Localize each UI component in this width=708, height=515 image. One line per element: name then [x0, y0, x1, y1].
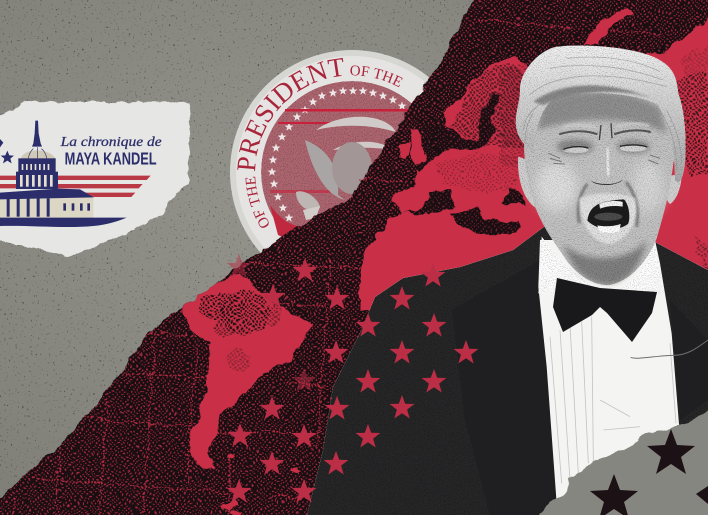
seal eagle and rays	[270, 109, 410, 245]
mouth interior	[587, 199, 629, 229]
Europe detail	[400, 57, 525, 234]
South America	[182, 273, 313, 470]
eyes	[563, 145, 647, 153]
red stars field	[227, 254, 478, 502]
Great Britain	[410, 130, 425, 165]
torn paper card	[0, 102, 190, 257]
background speckles	[0, 0, 480, 515]
tongue	[594, 213, 622, 221]
hair	[516, 45, 686, 182]
eye sockets shade	[557, 139, 593, 154]
cheeks	[536, 163, 577, 211]
Africa and Asia landmass	[360, 8, 708, 310]
forehead shadow	[537, 92, 667, 133]
shirt pleats	[550, 317, 676, 483]
flag stripes	[0, 176, 151, 197]
Capitol building	[0, 121, 94, 218]
Scandinavia and Russia	[443, 57, 525, 150]
heading line one: La chronique de	[60, 135, 162, 150]
small islands	[222, 454, 300, 515]
portrait: tuxedo shirt	[538, 240, 708, 515]
ground swoosh	[0, 218, 127, 227]
heading line two: MAYA KANDEL	[65, 149, 157, 169]
jaw stubble	[563, 240, 647, 285]
mouth lips	[579, 193, 636, 244]
Central Europe halftone	[433, 152, 517, 193]
ears	[518, 157, 547, 208]
small stars	[0, 139, 14, 163]
nose	[590, 145, 624, 186]
label card: La chronique de Maya Kandel	[0, 102, 190, 257]
Amazon halftone	[198, 290, 281, 372]
Western Mediterranean	[405, 190, 455, 213]
hair strands	[523, 57, 682, 170]
Black Sea	[501, 186, 524, 205]
jacket lapel shading	[452, 260, 708, 515]
crow's feet	[548, 153, 660, 164]
collar left	[538, 237, 600, 293]
North Sea and Baltic	[415, 92, 501, 173]
Greenland sliver	[583, 8, 632, 45]
nasolabial folds	[578, 182, 637, 227]
seal lettering: OF THE PRESIDENT OF THE	[237, 58, 403, 228]
microphone wire	[631, 340, 708, 358]
face	[524, 78, 675, 285]
bow tie	[553, 278, 657, 342]
seal star ring	[268, 86, 406, 222]
portrait: suit jacket	[307, 226, 708, 515]
hair shadow sweep	[533, 85, 660, 105]
far-east specks	[695, 235, 708, 270]
portrait: head	[516, 45, 686, 293]
Scandinavia halftone	[450, 63, 525, 147]
collar right	[617, 243, 663, 293]
upper teeth	[599, 201, 623, 209]
Asia halftone	[675, 70, 708, 177]
West Africa halftone behind head	[500, 62, 525, 165]
presidential seal	[230, 50, 429, 253]
brows	[560, 130, 650, 134]
Ireland	[400, 143, 410, 157]
torn paper with black stars	[530, 403, 708, 515]
Siberian halftone	[680, 45, 708, 77]
lower teeth	[597, 224, 621, 233]
Eastern Mediterranean	[450, 205, 520, 234]
